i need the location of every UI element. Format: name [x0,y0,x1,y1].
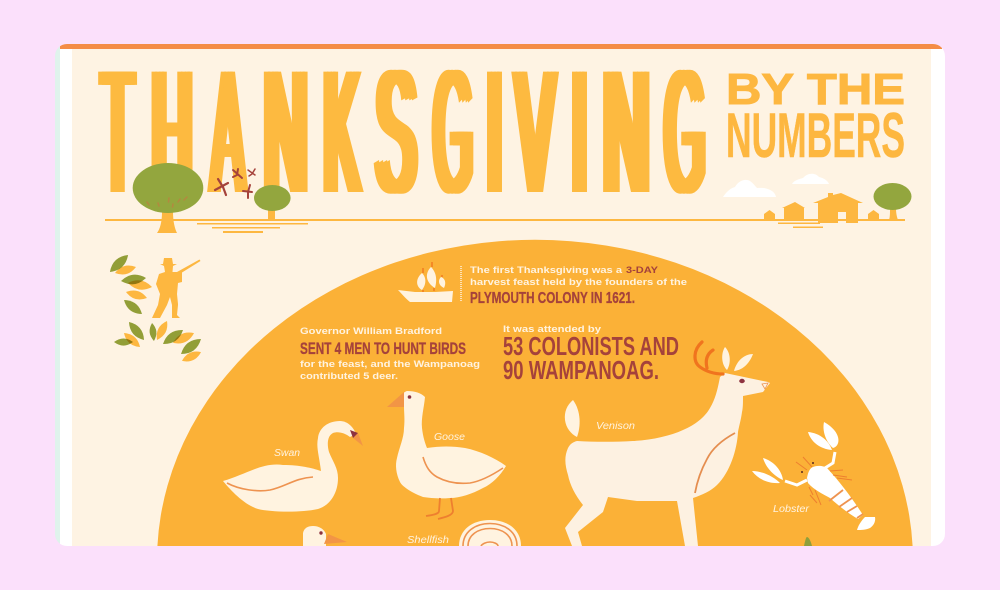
icon: mayflower ship [398,262,453,302]
title: T [97,35,129,230]
dotted divider [460,266,462,302]
text: first thanksgiving: 3-DAY [626,265,658,275]
subtitle: by the numbers: BY THE [726,65,905,114]
title: N [598,35,643,230]
illustration: deer [565,342,770,546]
title: K [319,35,354,230]
illustration: lobster [752,422,875,530]
icon: small tree [254,185,291,220]
text: governor bradford: for the feast, and the Wampanoag [300,358,480,369]
text: first thanksgiving: harvest feast held by the founders of the [470,276,687,287]
panel: orange semicircle [157,240,913,546]
text: governor bradford: Governor William Bradford [300,325,442,336]
title: I [482,35,497,230]
text: governor bradford: SENT 4 MEN TO HUNT BIRDS [300,339,466,358]
icon: clouds [723,174,829,197]
icon: village houses [764,193,879,223]
icon: flying birds [215,169,255,198]
title: A [207,35,240,230]
illustration: swan [223,421,363,512]
title: N [258,35,301,230]
title: I [567,35,582,230]
icon: right tree [874,183,912,220]
text: attendance [504,326,678,380]
subtitle: by the numbers [728,74,904,158]
illustration: deer: Venison [596,421,635,432]
title: S [371,35,411,230]
illustration: bird head [303,526,347,546]
illustration: shellfish: Shellfish [407,535,449,546]
text: first thanksgiving: PLYMOUTH COLONY IN 1621. [470,290,635,307]
text: attendance: 53 COLONISTS AND [503,331,679,361]
title: G [428,35,467,230]
text: attendance: 90 WAMPANOAG. [503,355,659,385]
text: governor bradford: contributed 5 deer. [300,370,398,381]
title: H [147,35,187,230]
illustration: goose [387,391,506,519]
icon: autumn leaves [107,252,204,365]
illustration: goose: Goose [434,432,465,443]
text: first thanksgiving [470,266,687,304]
illustration: shellfish [407,520,521,546]
text: attendance: It was attended by [503,323,602,334]
title: G [660,35,701,230]
illustration: lobster: Lobster [773,504,810,515]
illustration: green leaf tip [804,537,812,546]
title: V [511,35,549,230]
title [98,70,706,194]
panel: infographic card [55,44,945,546]
icon: large tree [133,163,203,233]
ground line [105,219,905,233]
illustration: swan: Swan [274,448,300,459]
icon: hunter silhouette [152,258,200,318]
text: governor bradford [300,325,480,381]
text: first thanksgiving: The first Thanksgiving was a [470,264,623,275]
